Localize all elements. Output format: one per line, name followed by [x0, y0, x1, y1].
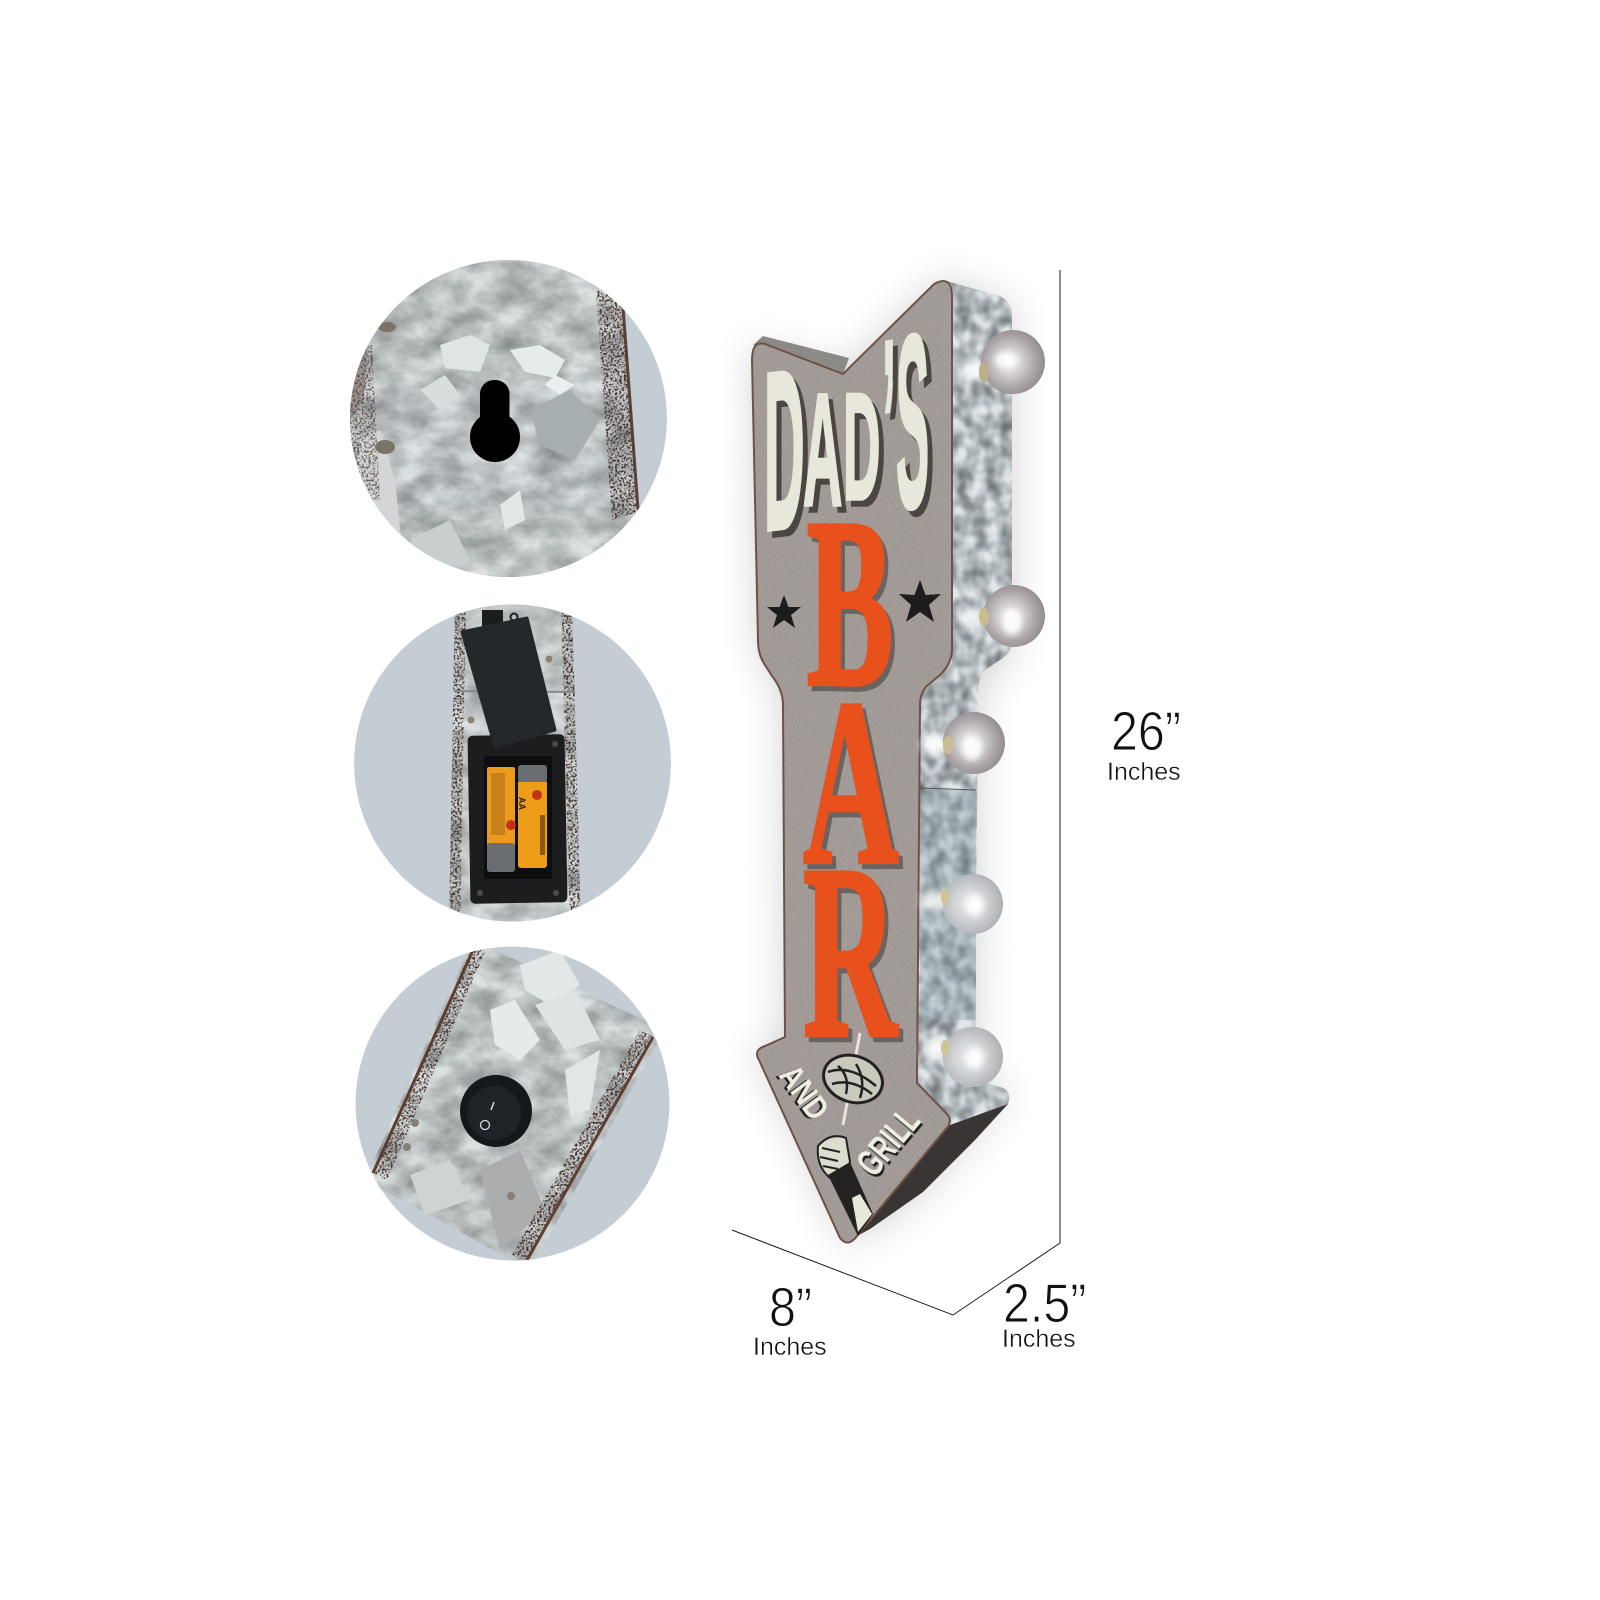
- product: marquee arrow sign: [752, 280, 1045, 1243]
- icon: right star: [899, 580, 941, 622]
- label: height 26 inches: [1107, 700, 1181, 786]
- light bulb 3: [921, 712, 1005, 774]
- metal plate with keyhole: [350, 260, 640, 577]
- heading: B A R: [803, 470, 899, 1089]
- icon: left star: [767, 595, 801, 628]
- heading: B A R: R: [803, 815, 898, 1089]
- battery right: [517, 765, 547, 868]
- label: height 26 inches: 26”: [1111, 700, 1181, 762]
- metal strip: [449, 600, 581, 925]
- label: width 8 inches: 8”: [769, 1276, 812, 1338]
- top side of arrow tail: [753, 336, 849, 374]
- light bulb 4: [921, 874, 1003, 934]
- heading: DAD'S: A: [803, 362, 842, 540]
- heading: DAD'S: [764, 281, 929, 578]
- label: depth 2.5 inches: 2.5”: [1003, 1272, 1086, 1334]
- icon: fork with steak in hand: [817, 1033, 889, 1236]
- text: AND: AND: [772, 1058, 836, 1127]
- sign drop shadow: [753, 280, 1012, 1244]
- panel: keyhole detail circle: [340, 250, 667, 590]
- heading: DAD'S: ’S: [882, 281, 929, 566]
- light bulb 2: [959, 585, 1045, 647]
- battery left: [487, 767, 516, 872]
- battery right: AA: [517, 797, 527, 810]
- label: depth 2.5 inches: Inches: [1002, 1325, 1076, 1353]
- light bulb 5: [921, 1027, 1003, 1087]
- panel: power switch detail circle: [356, 940, 670, 1270]
- battery cover: [462, 610, 555, 747]
- label: width 8 inches: Inches: [753, 1333, 827, 1361]
- dimension lines: [732, 270, 1060, 1315]
- panel: battery compartment detail circle: [354, 600, 671, 925]
- front face: [752, 281, 952, 1243]
- heading: B A R: A: [803, 652, 899, 914]
- light bulb 1: [959, 330, 1045, 394]
- label: width 8 inches: [753, 1276, 827, 1361]
- battery holder: [468, 734, 567, 904]
- heading: DAD'S: D: [843, 362, 880, 532]
- heading: DAD'S: D: [764, 321, 805, 578]
- rocker switch: [460, 1075, 532, 1147]
- galvanized side panel: [917, 280, 1012, 1130]
- underside shadow panel: [857, 1104, 1008, 1236]
- label: height 26 inches: Inches: [1107, 758, 1181, 786]
- heading: B A R: B: [807, 470, 893, 738]
- metal strip: [365, 940, 665, 1270]
- text: GRILL: GRILL: [848, 1099, 928, 1184]
- keyhole: [470, 380, 520, 462]
